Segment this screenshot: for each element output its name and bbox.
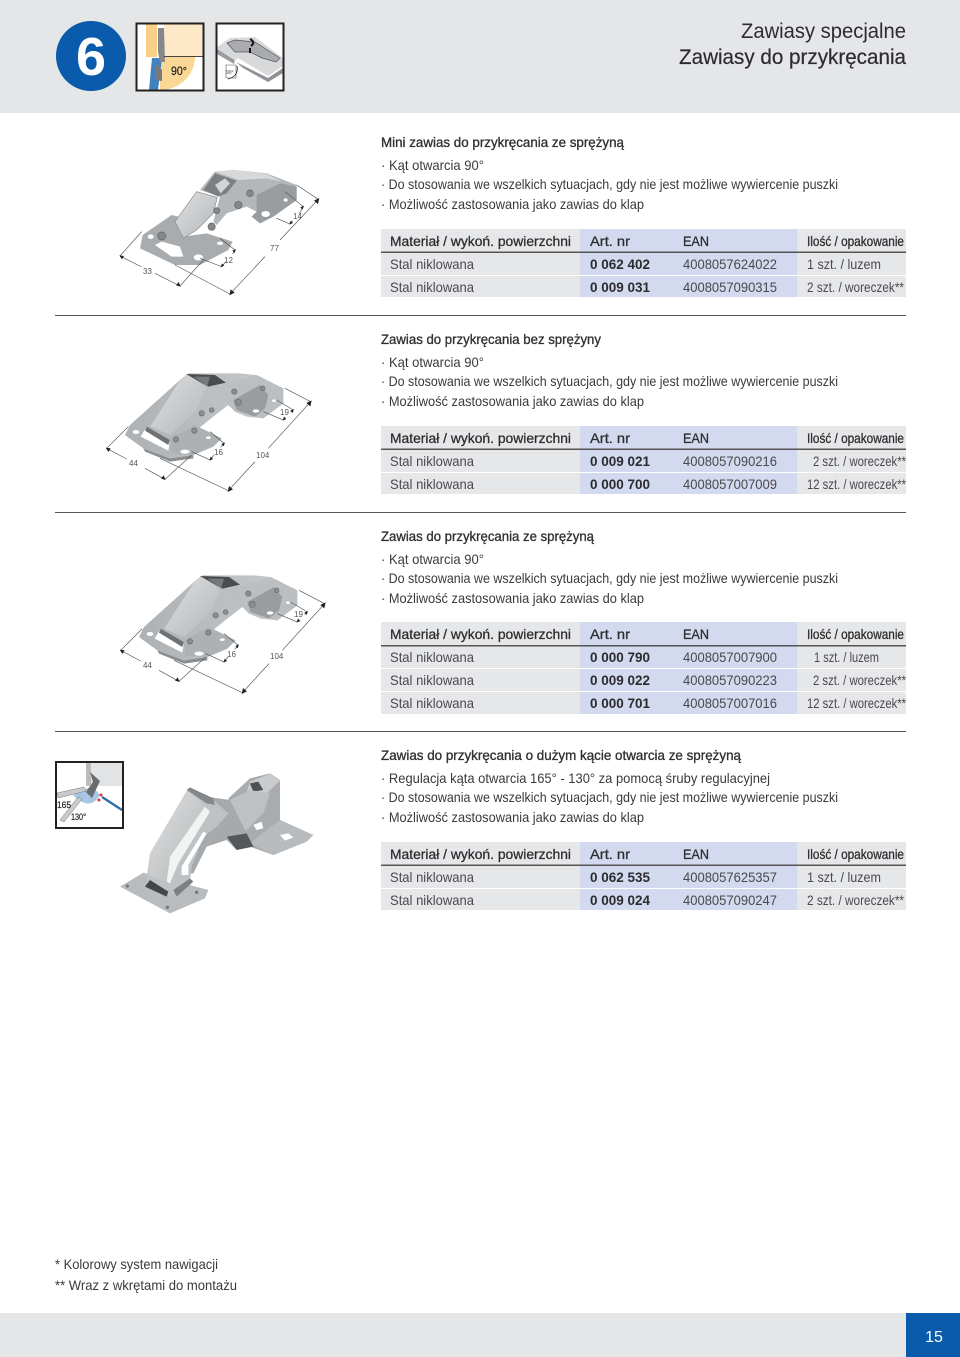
feature list: · Kąt otwarcia 90° bbox=[381, 157, 484, 173]
page title bbox=[679, 20, 906, 69]
product table: Materiał / wykoń. powierzchni bbox=[390, 233, 571, 249]
product table bbox=[381, 842, 906, 910]
panel: wide-angle hinge with spring bbox=[56, 747, 906, 913]
feature list: · Możliwość zastosowania jako zawias do klap bbox=[381, 590, 644, 606]
feature list bbox=[381, 551, 838, 606]
product table: 2 szt. / woreczek** bbox=[813, 453, 906, 469]
product table: Stal niklowana bbox=[390, 892, 474, 908]
product table: 0 009 022 bbox=[590, 672, 650, 688]
feature list: · Do stosowania we wszelkich sytuacjach, gdy nie jest możliwe wywiercenie puszki bbox=[381, 373, 838, 389]
feature list: · Kąt otwarcia 90° bbox=[381, 551, 484, 567]
product table: 12 szt. / woreczek** bbox=[807, 695, 906, 711]
product table: Art. nr bbox=[590, 430, 630, 446]
chapter number badge bbox=[56, 21, 126, 91]
product table: Stal niklowana bbox=[390, 649, 474, 665]
hinge illustration with dimensions bbox=[119, 170, 319, 295]
product table: 2 szt. / woreczek** bbox=[813, 672, 906, 688]
product table: Stal niklowana bbox=[390, 453, 474, 469]
icon: adjustable opening angle bbox=[56, 762, 123, 828]
panel: hinge without spring bbox=[106, 331, 906, 494]
product table: 0 009 024 bbox=[590, 892, 650, 908]
product table: 0 000 700 bbox=[590, 476, 650, 492]
product table: Ilość / opakowanie bbox=[807, 626, 904, 642]
product table: 0 009 031 bbox=[590, 279, 650, 295]
feature list: · Możliwość zastosowania jako zawias do klap bbox=[381, 196, 644, 212]
product table: 0 000 790 bbox=[590, 649, 650, 665]
heading: Zawias do przykręcania bez sprężyny bbox=[381, 331, 601, 347]
product table: 4008057625357 bbox=[683, 869, 777, 885]
hinge illustration with dimensions: 77 bbox=[270, 244, 279, 253]
page title: Zawiasy do przykręcania bbox=[679, 46, 906, 69]
footnotes: ** Wraz z wkrętami do montażu bbox=[55, 1277, 237, 1293]
product table: Materiał / wykoń. powierzchni bbox=[390, 430, 571, 446]
product table: Ilość / opakowanie bbox=[807, 233, 904, 249]
product table: 0 062 535 bbox=[590, 869, 650, 885]
hinge illustration with dimensions: 16 bbox=[227, 650, 236, 659]
feature list: · Do stosowania we wszelkich sytuacjach, gdy nie jest możliwe wywiercenie puszki bbox=[381, 789, 838, 805]
product table: 1 szt. / luzem bbox=[807, 869, 881, 885]
product table: Ilość / opakowanie bbox=[807, 430, 904, 446]
footnotes bbox=[55, 1256, 237, 1293]
product table: EAN bbox=[683, 233, 709, 249]
product table: Stal niklowana bbox=[390, 476, 474, 492]
hinge illustration with dimensions: 19 bbox=[294, 610, 303, 619]
product table: Stal niklowana bbox=[390, 695, 474, 711]
product table: 2 szt. / woreczek** bbox=[807, 279, 904, 295]
product table: Ilość / opakowanie bbox=[807, 846, 904, 862]
hinge illustration bbox=[120, 773, 313, 913]
icon: adjustable opening angle: 130° bbox=[71, 812, 86, 822]
feature list bbox=[381, 157, 838, 212]
product table bbox=[381, 622, 906, 714]
feature list bbox=[381, 354, 838, 409]
hinge illustration with dimensions: 104 bbox=[256, 451, 270, 460]
hinge illustration with dimensions: 19 bbox=[280, 408, 289, 417]
heading: Zawias do przykręcania ze sprężyną bbox=[381, 528, 594, 544]
product table: 1 szt. / luzem bbox=[807, 256, 881, 272]
panel: hinge with spring bbox=[120, 528, 906, 714]
product table: EAN bbox=[683, 626, 709, 642]
hinge illustration with dimensions: 16 bbox=[214, 448, 223, 457]
icon: 90 degree door hinge: 90° bbox=[171, 64, 187, 78]
product table: Stal niklowana bbox=[390, 279, 474, 295]
product table: 2 szt. / woreczek** bbox=[807, 892, 904, 908]
product table: Art. nr bbox=[590, 846, 630, 862]
product table: Art. nr bbox=[590, 233, 630, 249]
header band bbox=[0, 0, 960, 113]
product table: 4008057007900 bbox=[683, 649, 777, 665]
hinge illustration with dimensions: 44 bbox=[143, 661, 152, 670]
icon: mounted hinge on panels bbox=[216, 24, 284, 90]
page title: Zawiasy specjalne bbox=[741, 20, 906, 43]
product table: Art. nr bbox=[590, 626, 630, 642]
hinge illustration with dimensions bbox=[106, 373, 312, 492]
product table: 4008057007009 bbox=[683, 476, 777, 492]
hinge illustration with dimensions bbox=[120, 575, 326, 694]
product table: 0 000 701 bbox=[590, 695, 650, 711]
heading: Zawias do przykręcania o dużym kącie otwarcia ze sprężyną bbox=[381, 747, 741, 763]
icon: 90 degree door hinge bbox=[136, 24, 204, 90]
product table: 4008057090223 bbox=[683, 672, 777, 688]
page number bbox=[906, 1313, 960, 1357]
hinge illustration with dimensions: 14 bbox=[293, 212, 302, 221]
product table: EAN bbox=[683, 846, 709, 862]
panel: mini hinge with spring bbox=[119, 134, 906, 297]
product table bbox=[381, 229, 906, 297]
hinge illustration with dimensions: 44 bbox=[129, 459, 138, 468]
product table: 4008057624022 bbox=[683, 256, 777, 272]
product table: 4008057090216 bbox=[683, 453, 777, 469]
page number: 15 bbox=[925, 1329, 943, 1346]
heading: Mini zawias do przykręcania ze sprężyną bbox=[381, 134, 624, 150]
feature list: · Możliwość zastosowania jako zawias do klap bbox=[381, 393, 644, 409]
footer band bbox=[0, 1313, 960, 1357]
feature list: · Do stosowania we wszelkich sytuacjach, gdy nie jest możliwe wywiercenie puszki bbox=[381, 570, 838, 586]
hinge illustration with dimensions: 104 bbox=[270, 652, 284, 661]
feature list: · Kąt otwarcia 90° bbox=[381, 354, 484, 370]
footnotes: * Kolorowy system nawigacji bbox=[55, 1256, 218, 1272]
product table: 0 009 021 bbox=[590, 453, 650, 469]
hinge illustration with dimensions: 33 bbox=[143, 267, 152, 276]
feature list: · Regulacja kąta otwarcia 165° - 130° za pomocą śruby regulacyjnej bbox=[381, 770, 770, 786]
feature list: · Do stosowania we wszelkich sytuacjach, gdy nie jest możliwe wywiercenie puszki bbox=[381, 176, 838, 192]
icon: mounted hinge on panels: 90° bbox=[226, 70, 234, 76]
product table: 1 szt. / luzem bbox=[814, 649, 879, 665]
product table: Stal niklowana bbox=[390, 869, 474, 885]
chapter number badge: 6 bbox=[76, 27, 106, 87]
product table: 4008057007016 bbox=[683, 695, 777, 711]
product table: 4008057090315 bbox=[683, 279, 777, 295]
product table: Stal niklowana bbox=[390, 256, 474, 272]
icon: adjustable opening angle: 165 bbox=[57, 800, 71, 810]
product table bbox=[381, 426, 906, 494]
feature list bbox=[381, 770, 838, 825]
product table: 12 szt. / woreczek** bbox=[807, 476, 906, 492]
product table: 4008057090247 bbox=[683, 892, 777, 908]
product table: Materiał / wykoń. powierzchni bbox=[390, 846, 571, 862]
product table: EAN bbox=[683, 430, 709, 446]
product table: Stal niklowana bbox=[390, 672, 474, 688]
product table: Materiał / wykoń. powierzchni bbox=[390, 626, 571, 642]
product table: 0 062 402 bbox=[590, 256, 650, 272]
feature list: · Możliwość zastosowania jako zawias do klap bbox=[381, 809, 644, 825]
hinge illustration with dimensions: 12 bbox=[224, 256, 233, 265]
